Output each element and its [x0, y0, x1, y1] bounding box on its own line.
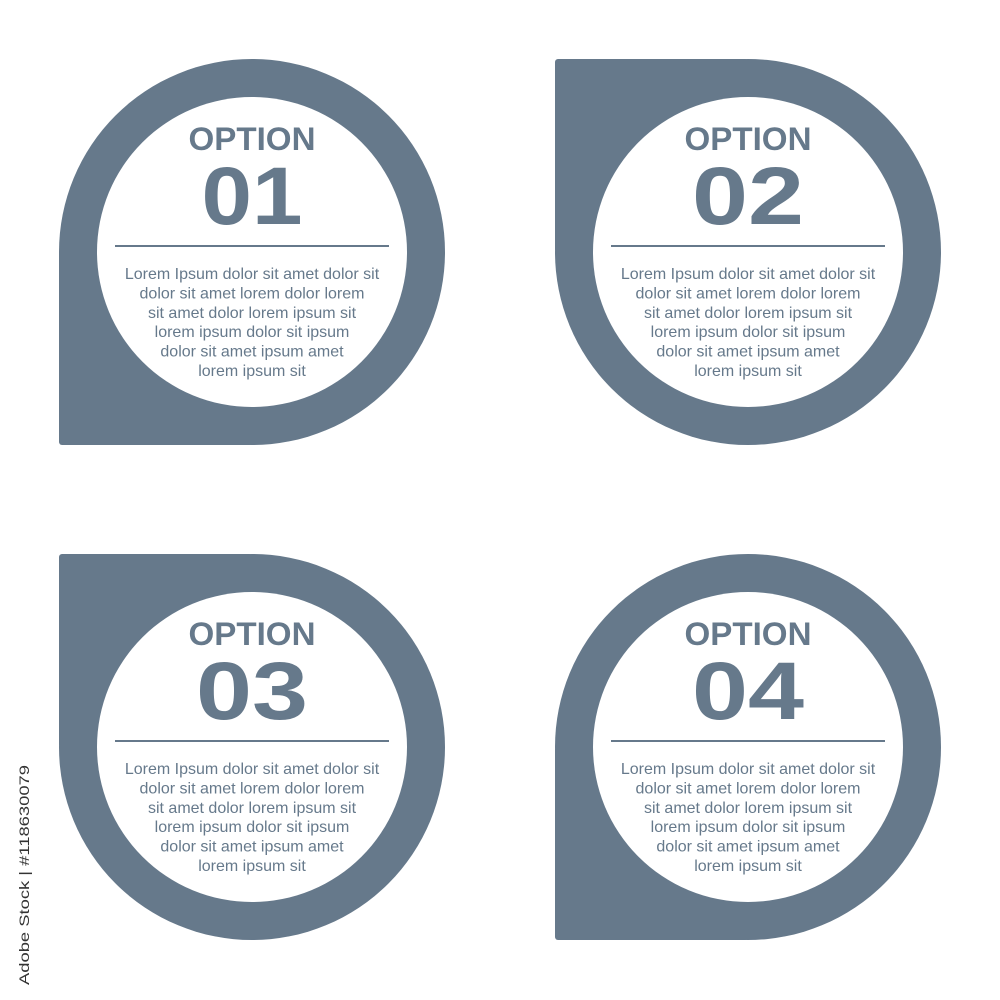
heading: OPTION 03 [188, 616, 316, 737]
watermark id text: Adobe Stock | #118630079 [16, 765, 32, 985]
badge shape: circle with top-left square corner [555, 59, 941, 445]
body text: lorem ipsum dolor sit ipsum [651, 324, 845, 341]
body text: dolor sit amet ipsum amet [656, 839, 840, 856]
body text: dolor sit amet lorem dolor lorem [636, 285, 860, 302]
body text: sit amet dolor lorem ipsum sit [644, 800, 853, 817]
body text: lorem ipsum dolor sit ipsum [651, 819, 845, 836]
body text: Lorem Ipsum dolor sit amet dolor sit [621, 761, 876, 778]
heading: OPTION 01: OPTION [188, 121, 316, 157]
body text: Lorem Ipsum dolor sit amet dolor sit [125, 266, 380, 283]
heading: OPTION 01: 01 [202, 151, 302, 242]
body text: lorem ipsum sit [694, 858, 802, 875]
badge shape: circle with bottom-left square corner [59, 59, 445, 445]
card: option 02 [555, 59, 941, 445]
heading: OPTION 04: OPTION [684, 616, 812, 652]
badge shape: circle with top-left square corner [59, 554, 445, 940]
body text: Lorem Ipsum dolor sit amet dolor sit [125, 761, 380, 778]
card: option 03 [59, 554, 445, 940]
body text: dolor sit amet lorem dolor lorem [636, 780, 860, 797]
body text: lorem ipsum sit [694, 363, 802, 380]
body text: dolor sit amet lorem dolor lorem [140, 780, 364, 797]
heading: OPTION 02: OPTION [684, 121, 812, 157]
heading: OPTION 03: OPTION [188, 616, 316, 652]
heading: OPTION 01 [188, 121, 316, 242]
body text [125, 266, 380, 380]
heading: OPTION 04: 04 [692, 646, 804, 737]
heading: OPTION 02 [684, 121, 812, 242]
body text: lorem ipsum dolor sit ipsum [155, 819, 349, 836]
body text: Lorem Ipsum dolor sit amet dolor sit [621, 266, 876, 283]
heading: OPTION 02: 02 [692, 151, 804, 242]
body text: dolor sit amet ipsum amet [160, 839, 344, 856]
body text: sit amet dolor lorem ipsum sit [148, 305, 357, 322]
body text: dolor sit amet ipsum amet [160, 344, 344, 361]
body text: lorem ipsum dolor sit ipsum [155, 324, 349, 341]
body text: lorem ipsum sit [198, 363, 306, 380]
body text: dolor sit amet lorem dolor lorem [140, 285, 364, 302]
body text: lorem ipsum sit [198, 858, 306, 875]
body text: sit amet dolor lorem ipsum sit [644, 305, 853, 322]
heading: OPTION 04 [684, 616, 812, 737]
badge shape: circle with bottom-left square corner [555, 554, 941, 940]
body text [125, 761, 380, 875]
body text [621, 266, 876, 380]
body text: sit amet dolor lorem ipsum sit [148, 800, 357, 817]
heading: OPTION 03: 03 [196, 646, 308, 737]
card: option 04 [555, 554, 941, 940]
body text: dolor sit amet ipsum amet [656, 344, 840, 361]
body text [621, 761, 876, 875]
card: option 01 [59, 59, 445, 445]
